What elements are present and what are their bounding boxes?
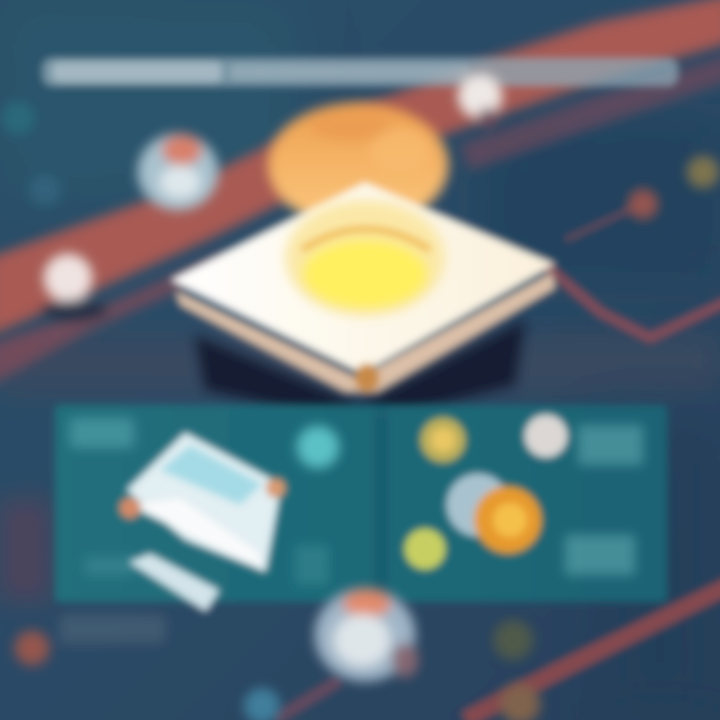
platform tip [355, 364, 379, 392]
node: left [43, 254, 107, 320]
teal panel [55, 405, 667, 612]
right panel text marks [565, 425, 643, 575]
platform side edge [175, 272, 556, 392]
platform shadow [195, 320, 525, 425]
node: top right [458, 74, 502, 128]
small icons right [628, 156, 719, 219]
panel circle teal [297, 426, 339, 468]
bottom dome node [315, 589, 418, 681]
right circuit lines [275, 205, 720, 720]
glowing centre [285, 200, 445, 316]
node: upper left [138, 134, 218, 210]
platform top [170, 182, 556, 374]
device illustration [119, 432, 286, 612]
title bar [42, 58, 678, 86]
panel left text marks [70, 418, 329, 585]
orange sun [268, 103, 448, 227]
bottom small icons [15, 615, 540, 720]
central platform [170, 182, 556, 425]
right panel icons [404, 414, 568, 570]
faint background marks left [1, 101, 61, 206]
diagonal red band [0, 0, 720, 385]
